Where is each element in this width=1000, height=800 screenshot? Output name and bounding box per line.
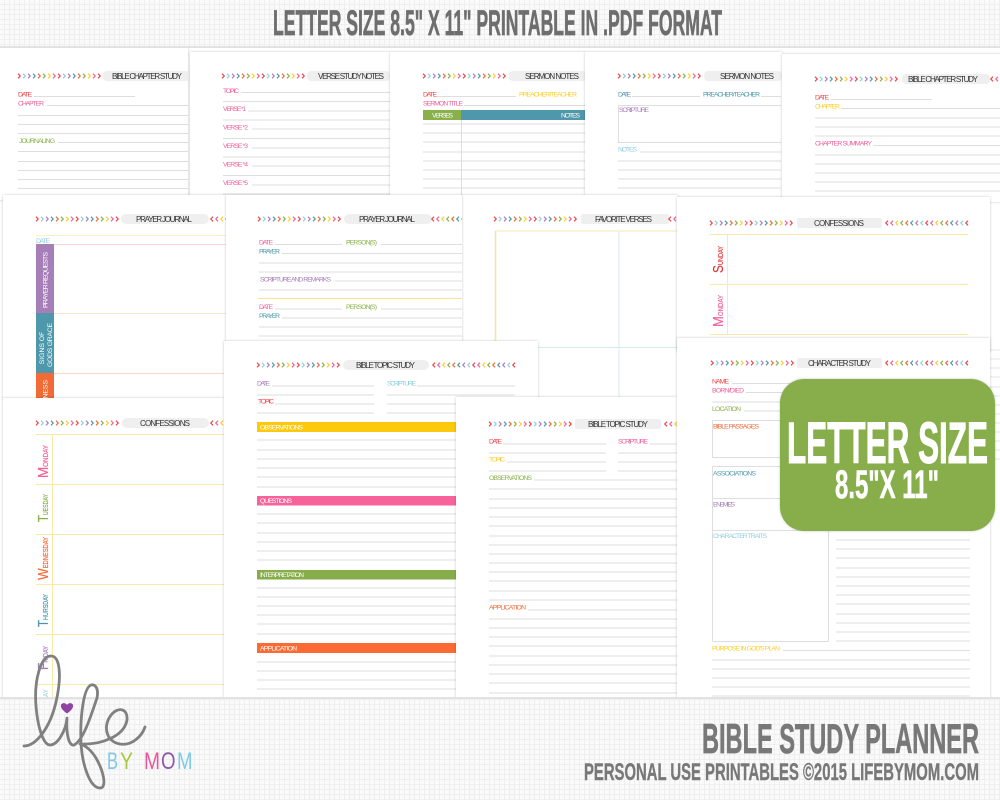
- sidebar block: prayer requests: PRAYER REQUESTS: [42, 252, 50, 308]
- day label: sunday: SUNDAY: [710, 246, 727, 273]
- day label: monday: MONDAY: [35, 445, 52, 478]
- day label: thursday: THURSDAY: [35, 594, 52, 627]
- heading: bible chapter study: BIBLE CHAPTER STUDY: [908, 75, 979, 84]
- sidebar block: signs of gods grace: GODS GRACE: [47, 323, 54, 367]
- panel: sermon notes 1: [390, 52, 587, 200]
- field labels: SCRIPTURE: [618, 438, 648, 446]
- table header bar: VERSES: [432, 112, 453, 120]
- logo text: by mom: Y: [120, 748, 133, 775]
- day label: tuesday: TUESDAY: [35, 494, 52, 522]
- field labels: TOPIC: [223, 88, 239, 95]
- field labels: ENEMIES: [713, 502, 735, 508]
- day label: monday: MONDAY: [710, 295, 727, 327]
- field labels: [257, 380, 416, 406]
- icon: heart: [61, 703, 73, 714]
- day label: saturday: SATURDAY: [35, 689, 52, 727]
- field labels: PURPOSE IN GOD'S PLAN: [712, 646, 780, 652]
- field labels: NOTES: [618, 146, 637, 154]
- panel: verse study notes: [190, 52, 390, 200]
- sidebar block: thankfulness: [36, 373, 54, 434]
- heading: bible topic study: BIBLE TOPIC STUDY: [356, 361, 416, 370]
- panel: bible topic study 2: [456, 397, 747, 703]
- day label: wednesday: WEDNESDAY: [35, 537, 52, 580]
- field labels: DATE: [618, 92, 631, 98]
- heading: verse study notes: VERSE STUDY NOTES: [318, 72, 384, 81]
- logo text: by mom: M: [144, 748, 160, 775]
- section bar: application: [257, 643, 515, 653]
- field labels: PRAYER: [259, 313, 280, 320]
- sidebar block: signs of gods grace: SIGNS OF: [39, 332, 46, 364]
- field labels: PRAYER: [259, 248, 280, 256]
- panel: confessions bottom: [3, 398, 293, 727]
- field labels: PERSON(S): [346, 240, 377, 246]
- logo text: by mom: O: [161, 748, 176, 775]
- section bar: questions: QUESTIONS: [260, 498, 292, 505]
- section bar: interpretation: INTERPRETATION: [260, 572, 304, 579]
- sidebar block: prayer requests: [36, 244, 54, 313]
- field labels: [223, 88, 248, 187]
- field labels: VERSE *5: [223, 180, 248, 187]
- section bar: interpretation: [257, 570, 515, 580]
- field labels: [423, 92, 577, 108]
- heading: prayer journal: PRAYER JOURNAL: [359, 215, 416, 224]
- panel: bible topic study 1: [224, 341, 538, 703]
- field labels: NAME: [712, 378, 729, 386]
- heading: sermon notes: SERMON NOTES: [720, 72, 774, 81]
- field labels: PERSON(S): [346, 304, 377, 311]
- day label: friday: FRIDAY: [35, 646, 52, 670]
- field labels: CHAPTER SUMMARY: [815, 140, 872, 148]
- field labels: SERMON TITLE: [423, 100, 463, 108]
- panel: bible chapter study 1: [0, 48, 198, 200]
- field labels: BORN/DIED: [712, 388, 744, 394]
- field labels: CHAPTER: [815, 104, 840, 110]
- field labels: ASSOCIATIONS: [713, 470, 756, 478]
- field labels: DATE: [257, 380, 270, 388]
- logo: life by mom: [24, 656, 192, 788]
- field labels: [815, 94, 872, 148]
- section bar: observations: OBSERVATIONS: [260, 424, 303, 432]
- heading: favorite verses: FAVORITE VERSES: [595, 215, 652, 224]
- field labels: SCRIPTURE AND REMARKS: [260, 276, 331, 284]
- panel: favorite verses: [462, 195, 751, 405]
- field labels: OBSERVATIONS: [489, 475, 532, 482]
- heading: prayer journal: PRAYER JOURNAL: [136, 215, 193, 224]
- table header bar: [423, 110, 586, 120]
- heading: sermon notes: SERMON NOTES: [525, 72, 579, 81]
- field labels: CHARACTER TRAITS: [713, 533, 767, 540]
- field labels: VERSE *3: [223, 143, 248, 150]
- field labels: JOURNALING: [19, 138, 55, 145]
- panel: prayer journal 2: [224, 194, 464, 341]
- field labels: VERSE *4: [223, 162, 248, 168]
- panel: prayer journal 1: DATE: [36, 238, 50, 245]
- panel: prayer journal 1: [3, 195, 293, 434]
- field labels: VERSE *2: [223, 124, 248, 132]
- heading: confessions: CONFESSIONS: [814, 219, 864, 228]
- section bar: observations: [257, 422, 515, 432]
- field labels: [618, 92, 760, 154]
- top grid band: [0, 0, 1000, 48]
- field labels: [259, 240, 377, 320]
- field labels: DATE: [423, 92, 437, 98]
- section bar: application: APPLICATION: [260, 646, 297, 652]
- logo text: by mom: [107, 748, 192, 775]
- field labels: DATE: [259, 240, 273, 246]
- sidebar block: signs of gods grace: [36, 313, 54, 373]
- field labels: TOPIC: [258, 398, 274, 406]
- panel: bible chapter study 2: [782, 54, 1000, 202]
- field labels: PREACHER/TEACHER: [703, 92, 760, 98]
- callout badge: letter size: [780, 379, 995, 531]
- heading: character study: CHARACTER STUDY: [808, 359, 872, 368]
- panel: character study: [677, 338, 990, 703]
- field labels: BIBLE PASSAGES: [713, 424, 759, 430]
- field labels: TOPIC: [489, 456, 505, 464]
- heading: bible chapter study: BIBLE CHAPTER STUDY: [112, 72, 183, 81]
- logo text: by mom: B: [107, 748, 118, 775]
- panel: sermon notes 2: [585, 52, 782, 200]
- panel: confessions top: [677, 197, 990, 352]
- field labels: [489, 438, 648, 612]
- field labels: [18, 92, 55, 145]
- field labels: DATE: [18, 92, 32, 98]
- verse grid: [495, 231, 678, 400]
- field labels: PREACHER/TEACHER: [519, 92, 577, 98]
- sidebar block: thankfulness: THANKFULNESS: [42, 380, 50, 434]
- section bar: questions: [257, 496, 515, 506]
- field labels: APPLICATION: [489, 604, 526, 612]
- field labels: SCRIPTURE: [619, 107, 649, 114]
- field labels: DATE: [815, 94, 829, 102]
- field labels: [712, 378, 780, 652]
- bottom grid band: [0, 697, 1000, 800]
- logo script: life: [24, 656, 145, 788]
- field labels: VERSE *1: [223, 106, 246, 113]
- heading: bible topic study: BIBLE TOPIC STUDY: [588, 420, 649, 429]
- field labels: LOCATION: [712, 406, 741, 413]
- logo text: by mom: M: [177, 748, 192, 775]
- field labels: DATE: [489, 438, 502, 446]
- field labels: CHAPTER: [18, 100, 44, 108]
- field labels: SCRIPTURE: [387, 380, 416, 388]
- heading: confessions: CONFESSIONS: [140, 419, 190, 428]
- table header bar: NOTES: [561, 112, 580, 120]
- field labels: DATE: [259, 304, 273, 311]
